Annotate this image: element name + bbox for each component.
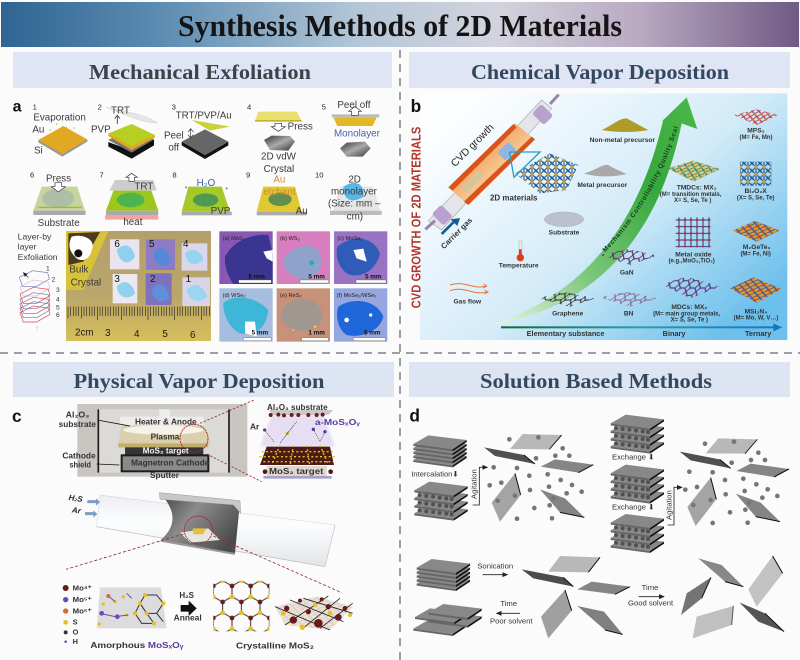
- step 5 peel off monolayer: 5: [322, 102, 326, 111]
- 2D materials lattice: 2D materials: [490, 194, 538, 203]
- step 7 heat: [99, 170, 158, 228]
- layer-by-layer exfoliation diagram: 5: [56, 304, 60, 311]
- legend of species: Mo⁴⁺: [73, 583, 92, 592]
- legend of species: Mo⁵⁺: [73, 595, 92, 604]
- heading: Physical Vapor Deposition: Physical Vapor Deposition: [74, 369, 325, 393]
- micrograph WS2: 5 mm: [308, 274, 325, 281]
- step 9 etchant: Au: [273, 174, 285, 185]
- good solvent arrow: Good solvent: [628, 599, 674, 608]
- legend of species: S: [73, 618, 78, 627]
- micrographs of monolayers: [219, 231, 387, 342]
- 2D materials lattice: [490, 152, 578, 203]
- layer-by-layer exfoliation diagram: 4: [56, 296, 60, 303]
- micrograph MoS2: [219, 231, 273, 284]
- photo of bulk crystal and wafers with ruler: Bulk: [69, 264, 89, 275]
- panel label c: c: [12, 406, 22, 426]
- Bi2O2X: (X= S, Se, Te): [737, 195, 774, 201]
- step 10 monolayer: (Size: mm –: [328, 199, 381, 210]
- heading: Mechanical Exfoliation: [13, 52, 392, 88]
- bottom axis: Elementary substance: [527, 329, 604, 338]
- step 9 etchant: Au: [296, 206, 308, 217]
- layer-by-layer exfoliation diagram: layer: [18, 241, 37, 251]
- photo of bulk crystal and wafers with ruler: 4: [183, 239, 189, 250]
- MSi2N4: (M= Mo, W, V…): [734, 315, 778, 321]
- step 10 monolayer: monolayer: [331, 186, 378, 197]
- sputter chamber: Plasma: [151, 432, 180, 441]
- M2GeTe3: [733, 221, 779, 258]
- step 3 peel off: TRT/PVP/Au: [176, 111, 232, 122]
- step 3 peel off: off: [168, 143, 179, 154]
- intercalation route: [411, 435, 468, 521]
- layer-by-layer exfoliation diagram: 3: [56, 287, 60, 294]
- step 3 peel off: Peel: [164, 130, 184, 141]
- micrograph MoSe2: (c) MoSe₂: [337, 236, 362, 242]
- step 7 heat: heat: [123, 217, 143, 228]
- MSi2N4: MSi₂N₄: [745, 308, 767, 315]
- step 2 TRT PVP: 2: [98, 102, 102, 111]
- photo of bulk crystal and wafers with ruler: Crystal: [71, 277, 101, 288]
- micrograph MoSe2: 5 mm: [365, 274, 382, 281]
- micrograph ReS2: 1 mm: [308, 330, 325, 337]
- step 4 press: 4: [247, 102, 252, 111]
- sputter zoom-in: [250, 403, 360, 479]
- metal precursor: Metal precursor: [577, 182, 628, 189]
- BN: BN: [624, 311, 634, 318]
- legend of species: O: [73, 628, 79, 637]
- non-metal precursor: Non-metal precursor: [590, 137, 655, 144]
- micrograph ReS2: [277, 288, 330, 342]
- MPS3: (M= Fe, Mn): [739, 135, 773, 141]
- step 1 evaporation: Evaporation: [33, 113, 86, 124]
- vertical title: CVD GROWTH OF 2D MATERIALS: [410, 127, 424, 308]
- amorphous plate: Amorphous MoSₓOᵧ: [90, 640, 184, 650]
- wafers: [110, 239, 210, 306]
- layer-by-layer exfoliation diagram: [18, 231, 60, 332]
- step 5 peel off monolayer: Peel off: [337, 100, 371, 111]
- heading: Chemical Vapor Deposition: Chemical Vapor Deposition: [471, 60, 729, 84]
- metal oxide: Metal oxide: [675, 252, 712, 259]
- step 1 evaporation: Si: [34, 145, 43, 156]
- step 9 etchant: 9: [246, 170, 250, 179]
- photo of bulk crystal and wafers with ruler: [66, 231, 211, 341]
- sonication step: Sonication: [477, 561, 513, 570]
- sputter zoom-in: a-MoSₓOᵧ: [315, 418, 360, 427]
- micrograph MoS2: (a) MoS₂: [223, 236, 245, 242]
- graphene: [538, 292, 595, 318]
- GaN: GaN: [620, 269, 634, 276]
- CVD tube furnace: [425, 95, 559, 230]
- step 6 press on substrate: Press: [46, 174, 71, 185]
- panel b: CVD growth diagram: [410, 93, 788, 340]
- panel label a: a: [13, 98, 22, 115]
- photo of bulk crystal and wafers with ruler: 2: [150, 274, 155, 285]
- MDCs: [653, 277, 720, 323]
- step 10 monolayer: cm): [347, 211, 363, 222]
- heading: Solution Based Methods: [409, 362, 790, 397]
- step 7 heat: TRT: [134, 181, 153, 192]
- MDCs: (M= main group metals,: [653, 311, 720, 317]
- photo of bulk crystal and wafers with ruler: 6: [114, 239, 120, 250]
- substrate: [544, 212, 584, 236]
- exchange route: Exchange ⬇: [612, 503, 655, 512]
- temperature: [499, 240, 539, 270]
- CVD tube furnace: CVD growth: [449, 122, 497, 169]
- step 8 water: PVP: [211, 206, 231, 217]
- annealing tube: H₂S: [68, 493, 84, 504]
- step 9 etchant: [246, 170, 308, 217]
- bottom axis: Binary: [663, 329, 686, 338]
- photo of bulk crystal and wafers with ruler: 4: [134, 329, 140, 340]
- layer-by-layer exfoliation diagram: 2: [52, 277, 56, 284]
- restacked sheets: [413, 604, 482, 636]
- agitation arrow right: Agitation: [664, 490, 673, 520]
- step 6 press on substrate: [30, 170, 86, 229]
- step 1 evaporation: [32, 102, 87, 157]
- step 6 press on substrate: Substrate: [38, 218, 80, 229]
- panel a: mechanical exfoliation steps: [13, 98, 381, 175]
- metal oxide: (e.g.,MoO₃,TiO₂): [669, 259, 715, 265]
- panel b background: [420, 93, 787, 340]
- anneal arrow: Anneal: [174, 614, 202, 623]
- step 10 monolayer: 2D: [348, 175, 361, 186]
- good solvent arrow: Time: [642, 583, 658, 592]
- step 8 water: [172, 170, 232, 217]
- step 10 monolayer: [315, 170, 382, 222]
- bottom axis: Ternary: [745, 329, 772, 338]
- growth arrow: [491, 98, 698, 325]
- heading: Solution Based Methods: Solution Based Methods: [480, 369, 712, 393]
- legend of species: H: [73, 637, 78, 646]
- Bi2O2X: Bi₂O₂X: [745, 188, 767, 195]
- photo of bulk crystal and wafers with ruler: 5: [162, 329, 168, 340]
- legend of species: [63, 583, 92, 646]
- photo of bulk crystal and wafers with ruler: 3: [105, 328, 111, 339]
- temperature: Temperature: [499, 263, 539, 270]
- poor solvent arrow: Time: [500, 599, 517, 608]
- micrograph ReS2: (e) ReS₂: [280, 293, 302, 299]
- Bi2O2X: [737, 162, 774, 201]
- micrograph WSe2: 5 mm: [252, 330, 269, 337]
- step 2 TRT PVP: PVP: [91, 125, 111, 136]
- carrier gas arrow: Carrier gas: [439, 216, 474, 251]
- step 10 monolayer: 10: [315, 170, 324, 179]
- panel d: solution based methods: [409, 405, 789, 638]
- MDCs: MDCs: MX₂: [671, 304, 707, 311]
- graphene: Graphene: [552, 311, 583, 318]
- micrograph MoS2: 5 mm: [248, 274, 265, 281]
- step 1 evaporation: 1: [33, 102, 37, 111]
- sonication step: [417, 559, 513, 591]
- photo of bulk crystal and wafers with ruler: 1: [186, 274, 191, 285]
- MPS3: [734, 109, 778, 141]
- micrograph MoSe2/WSe2: (f) MoSe₂/WSe₂: [337, 293, 377, 299]
- GaN: [600, 249, 657, 276]
- step 9 etchant: etchant: [263, 187, 296, 198]
- photo of bulk crystal and wafers with ruler: 2cm: [75, 327, 94, 338]
- sputter chamber: MoS₂ target: [143, 447, 189, 456]
- anneal arrow: H₂S: [179, 591, 195, 600]
- non-metal precursor: [590, 118, 655, 144]
- sputter chamber: substrate: [59, 420, 97, 429]
- substrate: Substrate: [549, 229, 580, 236]
- sputter chamber: Magnetron Cathode: [131, 459, 210, 468]
- TMDCs: [660, 161, 722, 204]
- anneal arrow: [174, 591, 202, 623]
- sputter chamber: Al₂O₃: [66, 411, 90, 420]
- growth arrow: Mechanism Controllability Quality Scalability: [602, 126, 678, 252]
- micrograph WSe2: (d) WSe₂: [223, 293, 246, 299]
- M2GeTe3: M₂GeTe₃: [743, 244, 771, 251]
- TMDCs: TMDCs: MX₂: [677, 185, 717, 192]
- layer-by-layer exfoliation diagram: Layer-by: [18, 231, 52, 241]
- step 8 water: 8: [172, 170, 177, 179]
- layer-by-layer exfoliation diagram: 1: [46, 266, 50, 273]
- step 4 press: [247, 102, 313, 175]
- photo of bulk crystal and wafers with ruler: 5: [149, 239, 155, 250]
- step 3 peel off: 3: [172, 102, 176, 111]
- step 7 heat: 7: [99, 170, 104, 179]
- micrograph WS2: (b) WS₂: [280, 236, 300, 242]
- metal precursor: [577, 165, 628, 189]
- heading: Chemical Vapor Deposition: [409, 52, 790, 88]
- title band: [1, 2, 799, 47]
- layer-by-layer exfoliation diagram: ⋮: [34, 326, 40, 332]
- step 6 press on substrate: 6: [30, 170, 34, 179]
- MSi2N4: [730, 277, 782, 321]
- sputter chamber: shield: [69, 460, 91, 469]
- agitation arrow left: Agitation: [469, 469, 478, 499]
- step 5 peel off monolayer: [322, 100, 381, 157]
- M2GeTe3: (M= Fe, Ni): [740, 252, 771, 258]
- metal oxide: [669, 217, 715, 265]
- micrograph MoSe2/WSe2: 5 mm: [364, 330, 381, 337]
- agitation arrow left: [469, 467, 487, 505]
- poor solvent arrow: [490, 599, 533, 626]
- intercalation route: Intercalation⬇: [411, 469, 459, 478]
- micrograph WS2: [277, 231, 330, 284]
- micrograph MoSe2: [334, 231, 387, 284]
- step 2 TRT PVP: TRT: [111, 105, 130, 116]
- sputter zoom-in: Ar: [250, 422, 259, 431]
- poor solvent arrow: Poor solvent: [490, 617, 533, 626]
- panel label b: b: [411, 96, 421, 116]
- dispersed flakes: [681, 556, 784, 638]
- heading: Physical Vapor Deposition: [13, 362, 394, 397]
- step 1 evaporation: Au: [32, 125, 44, 136]
- step 4 press: 2D vdW: [261, 151, 297, 162]
- MPS3: MPS₃: [747, 128, 765, 135]
- annealing tube: [66, 493, 342, 593]
- MDCs: X= S, Se, Te ): [671, 317, 708, 323]
- step 4 press: Crystal: [264, 164, 294, 175]
- amorphous plate: [90, 587, 184, 650]
- photo of bulk crystal and wafers with ruler: 3: [114, 274, 120, 285]
- step 5 peel off monolayer: Monolayer: [334, 129, 381, 140]
- gas flow: Gas flow: [453, 298, 482, 305]
- crystalline lattice: [213, 581, 353, 651]
- crystalline lattice: Crystalline MoS₂: [236, 641, 314, 651]
- title band: Synthesis Methods of 2D Materials: [178, 8, 622, 43]
- sputter zoom-in: Al₂O₃ substrate: [267, 403, 328, 412]
- gas flow: [450, 284, 488, 305]
- sonicated flakes: [522, 556, 630, 638]
- exfoliated nanosheets left: [484, 434, 593, 522]
- heading: Mechanical Exfoliation: Mechanical Exfoliation: [89, 60, 311, 84]
- BN: [600, 292, 657, 318]
- annealing tube: Ar: [70, 505, 82, 516]
- panel label d: d: [409, 405, 420, 425]
- sputter zoom-in: MoS₂ target: [269, 466, 324, 476]
- legend of species: Mo⁶⁺: [73, 606, 92, 615]
- step 8 water: H₂O: [197, 178, 216, 189]
- panel c: physical vapor deposition: [12, 400, 360, 651]
- agitation arrow right: [664, 487, 682, 525]
- micrograph MoSe2/WSe2: [334, 288, 387, 342]
- exchange route: [611, 415, 664, 553]
- sputter chamber: [59, 400, 262, 482]
- exfoliated nanosheets right: [680, 438, 789, 526]
- sputter chamber: Sputter: [150, 471, 179, 480]
- step 4 press: Press: [288, 121, 313, 132]
- micrograph WSe2: [219, 288, 273, 342]
- step 2 TRT PVP: [91, 102, 157, 159]
- sputter chamber: Heater & Anode: [135, 417, 197, 426]
- good solvent arrow: [628, 583, 674, 608]
- sputter chamber: Cathode: [62, 451, 96, 460]
- panel a: second row steps: [18, 170, 387, 342]
- step 3 peel off: [164, 102, 232, 159]
- TMDCs: (M= transition metals,: [660, 192, 722, 198]
- layer-by-layer exfoliation diagram: 6: [56, 312, 60, 319]
- photo of bulk crystal and wafers with ruler: 6: [190, 330, 196, 341]
- exchange route: Exchange ⬇: [612, 453, 655, 462]
- layer-by-layer exfoliation diagram: Exfoliation: [18, 252, 58, 262]
- TMDCs: X= S, Se, Te ): [674, 198, 711, 204]
- bottom axis: [501, 323, 782, 338]
